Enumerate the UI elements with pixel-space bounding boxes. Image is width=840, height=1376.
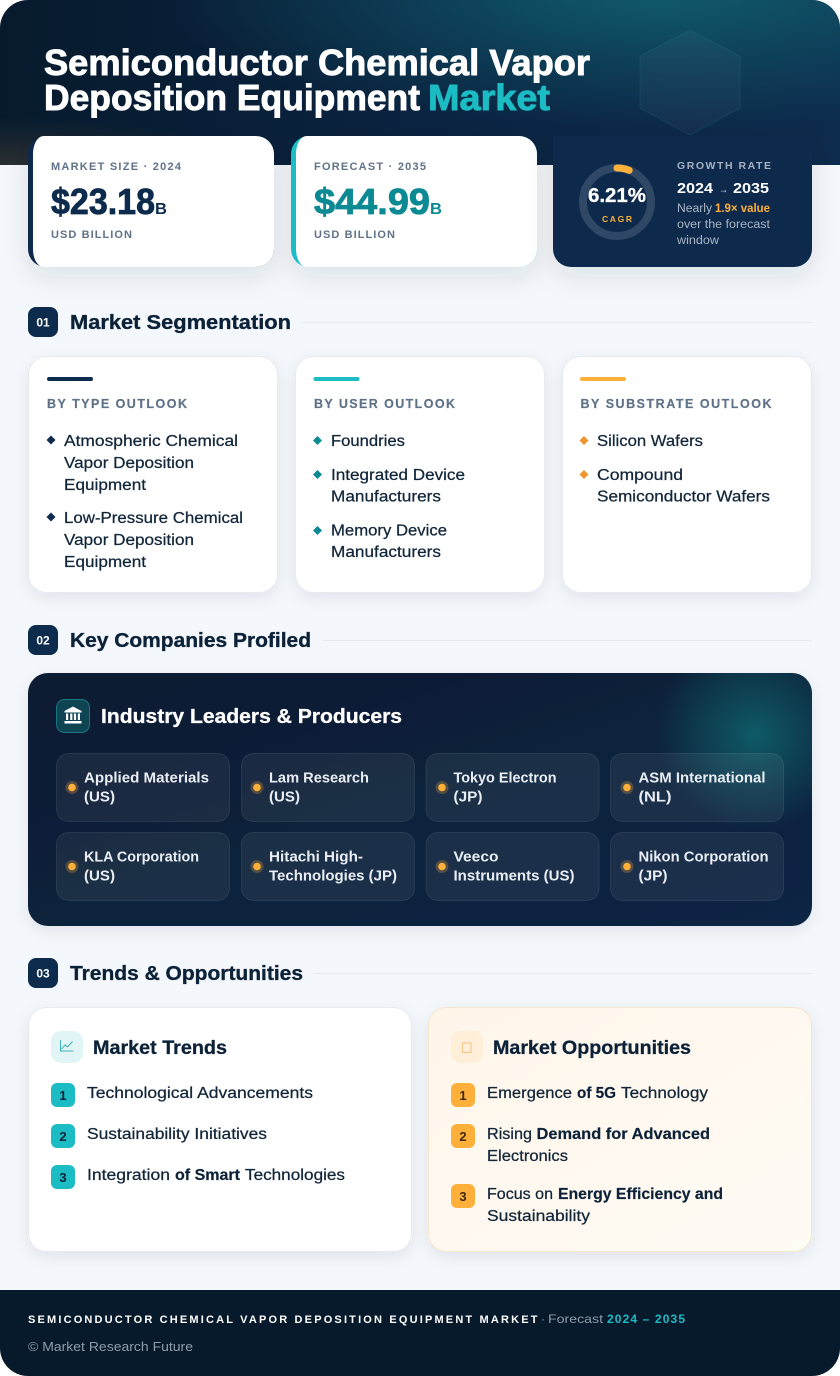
panel: industry leaders — [28, 673, 812, 926]
growth rate text: window — [676, 235, 720, 247]
CAGR ring: CAGR — [602, 214, 632, 224]
hexagon decoration — [640, 30, 740, 135]
company chip — [56, 754, 230, 822]
opportunity 2: Electronics — [487, 1148, 568, 1165]
opportunity 2: Demand for Advanced — [536, 1126, 710, 1143]
company chip — [610, 832, 784, 900]
panel: by user outlook: Memory Device — [331, 522, 447, 540]
growth rate text — [676, 160, 771, 247]
stat card: forecast: B — [430, 201, 442, 218]
panel: by user outlook: Foundries — [331, 433, 405, 450]
company chip: Hitachi High- — [269, 850, 363, 866]
section heading 02 — [28, 625, 812, 655]
panel: by type outlook: Vapor Deposition — [64, 532, 194, 549]
panel: market opportunities — [428, 1008, 812, 1252]
trend 2 — [51, 1124, 267, 1148]
section heading 02: Key Companies Profiled — [70, 629, 311, 652]
company chip — [56, 832, 230, 900]
company chip — [426, 832, 599, 900]
title: Market — [428, 77, 550, 118]
panel: by substrate outlook: Compound — [597, 467, 683, 484]
company chip: Veeco — [454, 850, 499, 866]
panel: by user outlook — [296, 356, 544, 592]
company chip — [242, 832, 414, 900]
stat card: market size: $23.18 — [51, 181, 155, 222]
panel: by type outlook: Low-Pressure Chemical — [64, 510, 243, 527]
panel: by substrate outlook: Silicon Wafers — [597, 433, 703, 450]
panel: by type outlook: Equipment — [64, 554, 147, 571]
panel: by type outlook: Vapor Deposition — [64, 455, 194, 472]
panel: by type outlook: BY TYPE OUTLOOK — [47, 397, 187, 411]
growth rate text: GROWTH RATE — [677, 160, 771, 172]
panel: by substrate outlook: BY SUBSTRATE OUTLOOK — [580, 397, 772, 411]
title: Deposition Equipment — [44, 77, 420, 118]
section heading 02: 02 — [36, 634, 50, 648]
opportunity 3 — [451, 1184, 723, 1225]
company chip: (JP) — [454, 790, 483, 806]
panel: by user outlook: Manufacturers — [331, 544, 441, 561]
opportunity 2: 2 — [459, 1129, 467, 1144]
panel: by type outlook: Atmospheric Chemical — [64, 433, 238, 450]
company chip: (NL) — [638, 790, 672, 806]
company chip: Applied Materials — [84, 770, 209, 786]
panel: market trends: Market Trends — [93, 1037, 227, 1059]
panel: by type outlook — [28, 356, 278, 592]
stat card: market size: B — [155, 201, 167, 218]
panel: market opportunities: Market Opportunities — [493, 1037, 691, 1059]
panel: by substrate outlook — [562, 356, 812, 592]
trend 3 — [51, 1165, 345, 1189]
title: Semiconductor Chemical Vapor — [44, 42, 590, 83]
trend 1 — [51, 1083, 313, 1107]
opportunity 1 — [451, 1083, 708, 1107]
panel: by substrate outlook: Semiconductor Wafers — [597, 488, 770, 506]
stat card: forecast: USD BILLION — [314, 229, 395, 241]
opportunity 3: 3 — [459, 1189, 467, 1204]
stat card: forecast: FORECAST · 2035 — [314, 161, 426, 173]
trend 3: Integration — [87, 1167, 170, 1184]
trend 1: 1 — [59, 1088, 67, 1103]
company chip: (US) — [269, 790, 300, 806]
growth rate text: → — [719, 182, 728, 196]
opportunity 3: Sustainability — [487, 1208, 590, 1225]
trend 2: 2 — [59, 1129, 67, 1144]
trend 3: 3 — [59, 1170, 67, 1185]
title — [44, 42, 590, 118]
trend 3: of Smart — [175, 1167, 240, 1184]
footer: Forecast — [548, 1312, 604, 1326]
company chip — [610, 754, 784, 822]
company chip: ASM International — [638, 770, 766, 786]
company chip: KLA Corporation — [84, 850, 199, 866]
trend 1: Technological Advancements — [87, 1085, 313, 1102]
icon: missing glyph box — [451, 1031, 483, 1063]
section heading 01: 01 — [36, 316, 50, 330]
stat card: market size: USD BILLION — [51, 229, 132, 241]
panel: by user outlook: Manufacturers — [331, 488, 441, 506]
growth rate text: 2035 — [733, 180, 769, 197]
company chip: (JP) — [638, 868, 668, 884]
footer: SEMICONDUCTOR CHEMICAL VAPOR DEPOSITION EQUIPMENT MARKET — [28, 1314, 538, 1326]
opportunity 2 — [451, 1124, 710, 1165]
trend 2: Sustainability Initiatives — [87, 1126, 267, 1143]
section heading 03 — [28, 958, 812, 988]
panel: by user outlook: Integrated Device — [331, 467, 465, 484]
stat card: growth rate — [553, 136, 812, 267]
stat card: forecast — [291, 136, 537, 267]
company chip: Instruments (US) — [454, 868, 575, 884]
CAGR ring — [583, 168, 651, 236]
panel: by user outlook: BY USER OUTLOOK — [314, 397, 455, 411]
stat card: market size — [28, 136, 274, 267]
company chip: Lam Research — [269, 770, 369, 786]
company chip — [426, 754, 599, 822]
company chip: (US) — [84, 868, 115, 884]
trend 3: Technologies — [245, 1167, 345, 1184]
stat card: forecast: $44.99 — [314, 181, 430, 222]
header banner — [0, 0, 840, 165]
footer: 2024 – 2035 — [607, 1312, 685, 1326]
growth rate text: over the forecast — [677, 219, 771, 231]
stat card: market size: MARKET SIZE · 2024 — [51, 161, 182, 173]
company chip — [242, 754, 414, 822]
footer — [0, 1290, 840, 1376]
growth rate text: 1.9× value — [715, 203, 770, 215]
icon: line chart — [51, 1031, 83, 1063]
growth rate text: 2024 — [677, 180, 714, 197]
opportunity 1: Emergence — [487, 1085, 572, 1102]
section heading 01: Market Segmentation — [70, 311, 291, 334]
company chip: Tokyo Electron — [454, 770, 556, 786]
company chip: (US) — [84, 790, 115, 806]
opportunity 2: Rising — [487, 1126, 532, 1143]
company chip: Technologies (JP) — [269, 868, 397, 884]
footer: · — [541, 1312, 545, 1326]
section heading 01 — [28, 307, 812, 337]
growth rate text: Nearly — [677, 203, 712, 215]
panel: by type outlook: Equipment — [64, 477, 147, 494]
opportunity 1: of 5G — [577, 1085, 616, 1102]
company chip: Nikon Corporation — [638, 850, 768, 866]
opportunity 1: Technology — [621, 1085, 708, 1102]
section heading 03: Trends & Opportunities — [70, 962, 303, 985]
CAGR ring: 6.21% — [588, 184, 646, 207]
section heading 03: 03 — [36, 966, 50, 980]
panel: industry leaders: Industry Leaders & Producers — [101, 705, 402, 728]
footer: © Market Research Future — [28, 1340, 193, 1354]
opportunity 3: Energy Efficiency and — [558, 1186, 723, 1203]
icon: bank building — [56, 700, 90, 732]
opportunity 3: Focus on — [487, 1186, 553, 1203]
panel: market trends — [28, 1008, 412, 1252]
opportunity 1: 1 — [459, 1088, 467, 1103]
